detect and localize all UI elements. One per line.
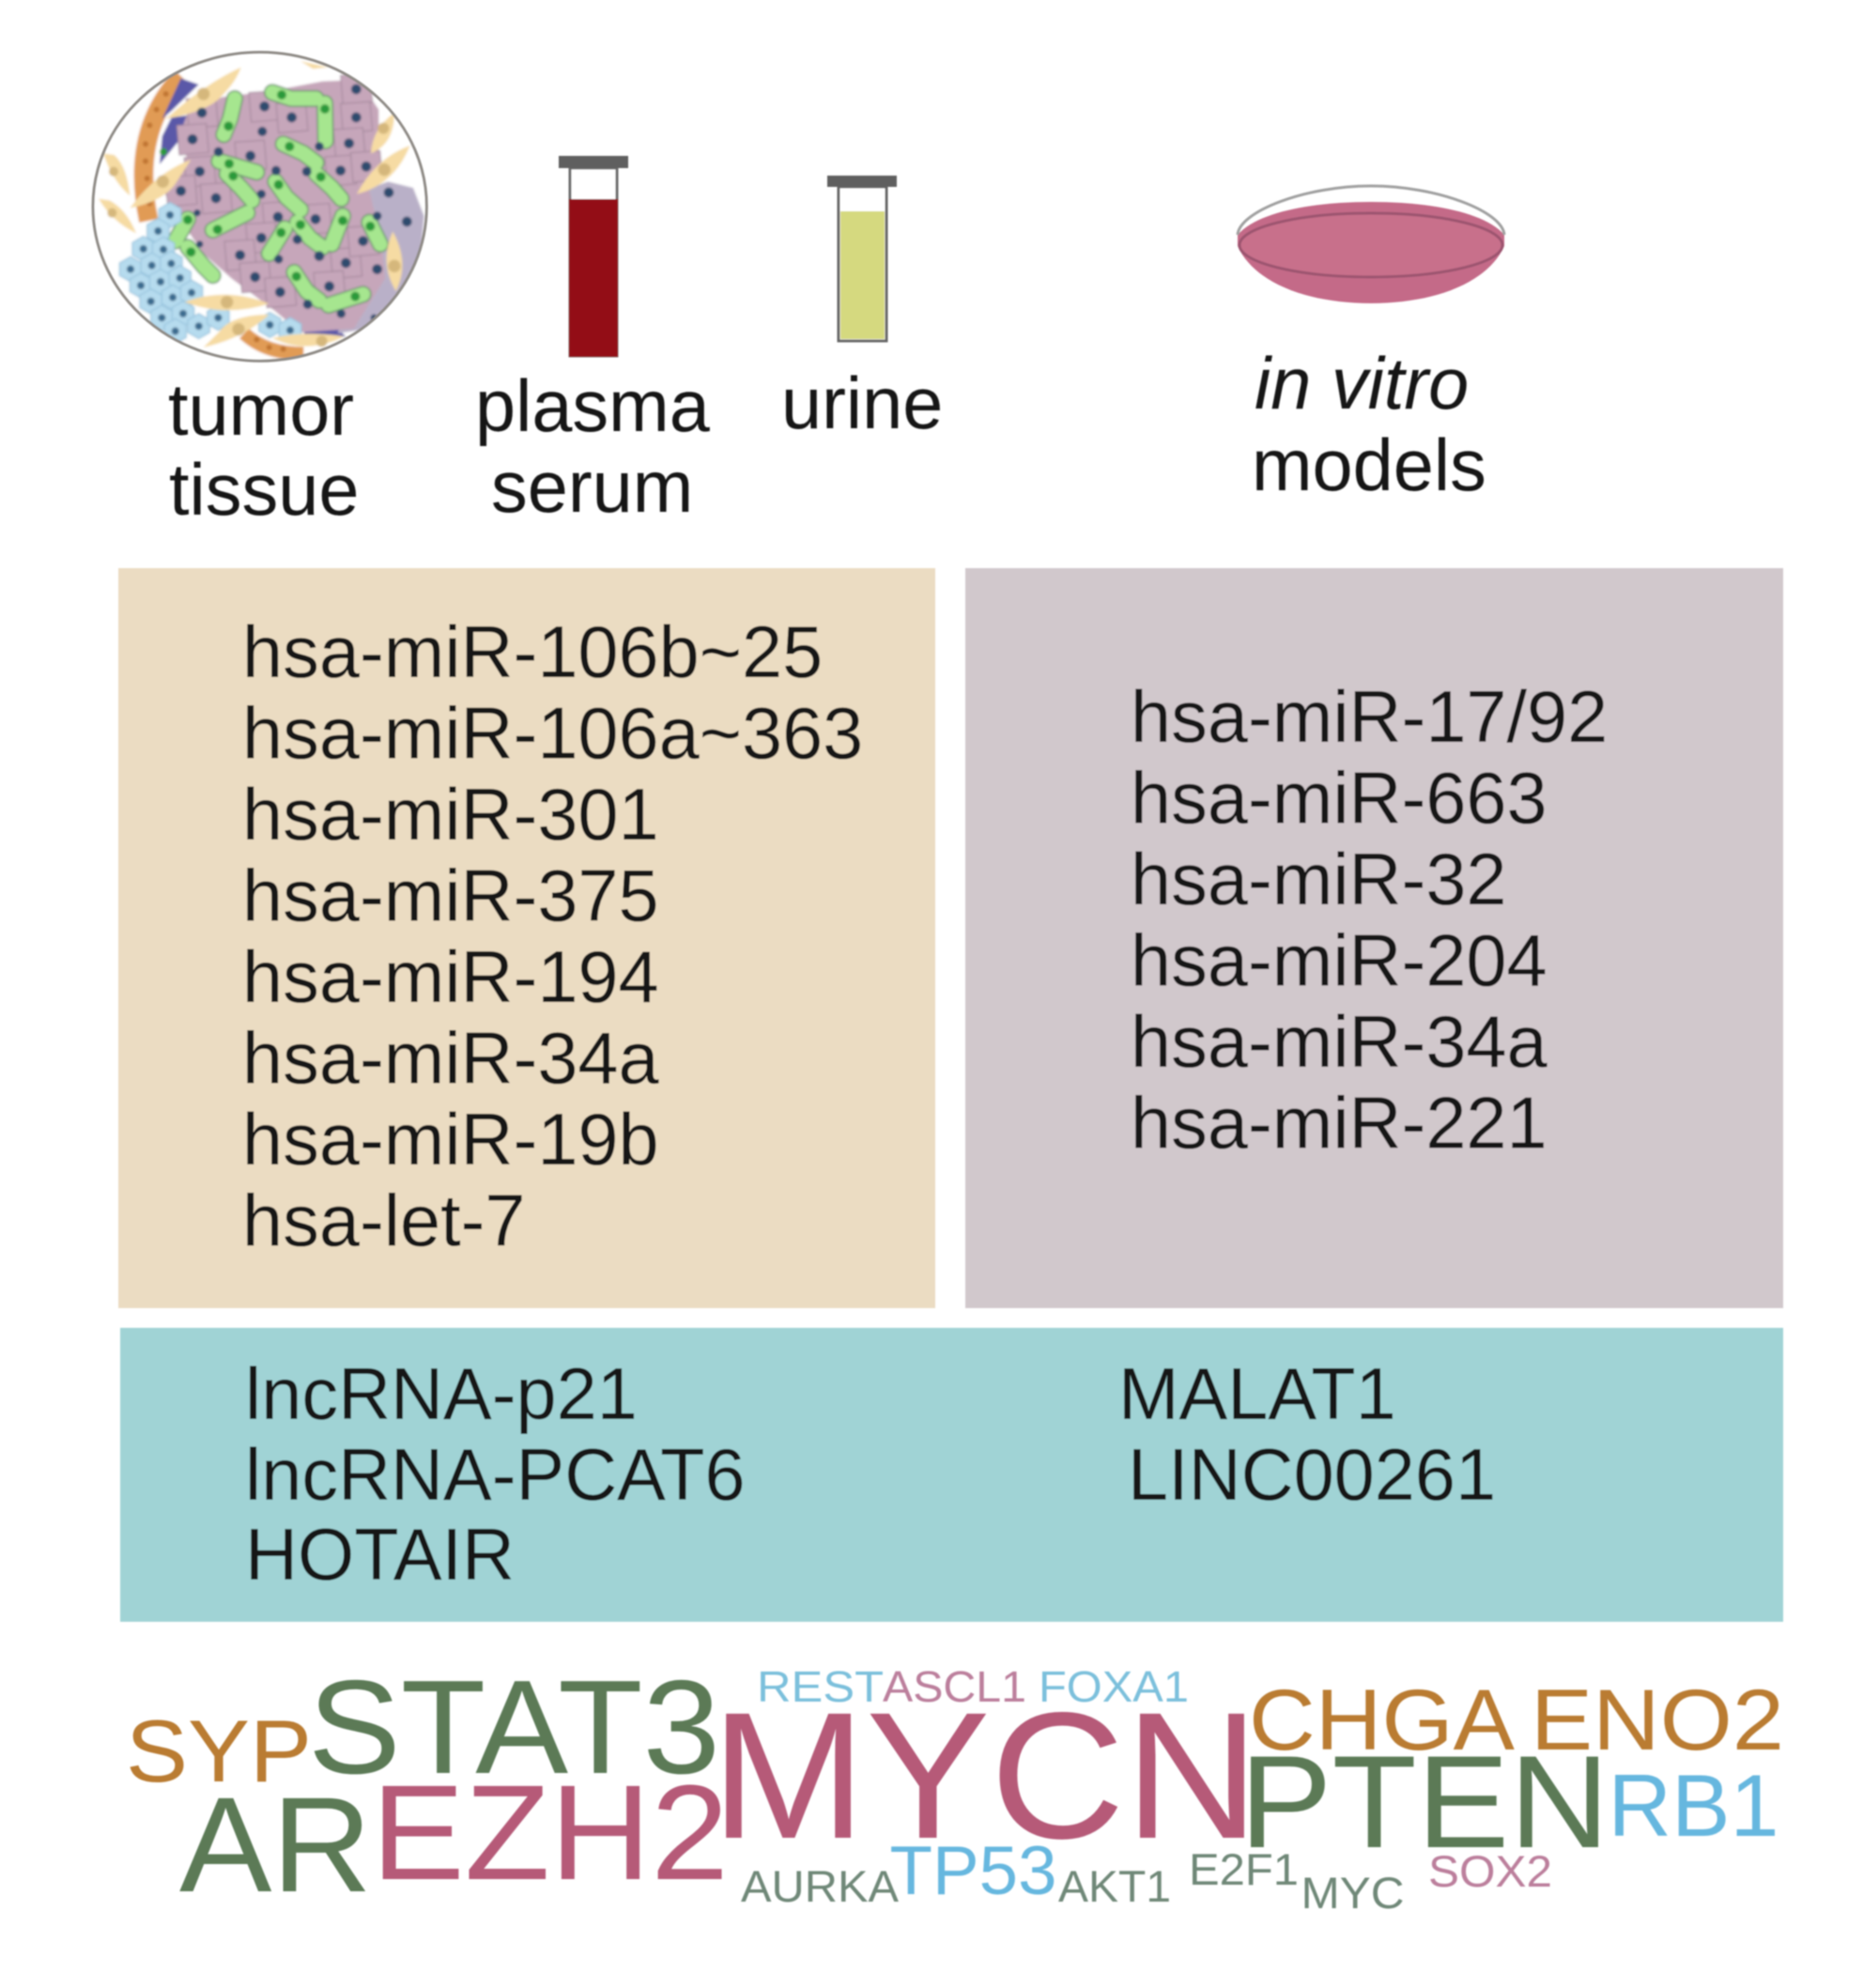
word cloud: genes: ENO2: [1531, 1672, 1784, 1768]
panel: grey miRNA list: hsa-miR-32: [1131, 840, 1507, 920]
label: plasma serum: serum: [491, 447, 693, 528]
panel: grey miRNA list: hsa-miR-204: [1131, 920, 1547, 1001]
word cloud: genes: [126, 1653, 1784, 1920]
panel: peach miRNA list: hsa-miR-106a~363: [242, 693, 863, 774]
word cloud: genes: ASCL1: [883, 1662, 1026, 1711]
icon: tumor tissue circle: [87, 44, 432, 369]
panel: grey miRNA list: [965, 568, 1783, 1308]
label: tumor tissue: tissue: [169, 450, 359, 531]
panel: teal lncRNA list: lncRNA-PCAT6: [245, 1435, 746, 1516]
word cloud: genes: PTEN: [1239, 1728, 1609, 1875]
word cloud: genes: MYCN: [711, 1674, 1259, 1876]
panel: peach miRNA list: hsa-miR-19b: [242, 1100, 659, 1180]
icon: plasma tube: [559, 156, 628, 357]
panel: grey miRNA list: hsa-miR-17/92: [1131, 677, 1608, 758]
word cloud: genes: AURKA: [741, 1861, 900, 1911]
panel: teal lncRNA list: LINC00261: [1128, 1435, 1496, 1516]
word cloud: genes: E2F1: [1189, 1844, 1299, 1894]
label: in vitro models: models: [1252, 425, 1486, 506]
word cloud: genes: RB1: [1608, 1756, 1778, 1855]
label: in vitro models: [1252, 344, 1486, 506]
label: urine: urine: [781, 363, 943, 444]
word cloud: genes: MYC: [1301, 1868, 1405, 1918]
label: in vitro models: in vitro: [1255, 344, 1469, 424]
word cloud: genes: SYP: [126, 1702, 312, 1800]
word cloud: genes: REST: [757, 1662, 884, 1711]
panel: teal lncRNA list: MALAT1: [1118, 1354, 1396, 1435]
label: plasma serum: plasma: [475, 366, 711, 447]
panel: grey miRNA list: hsa-miR-663: [1131, 759, 1547, 840]
label: tumor tissue: [168, 370, 359, 531]
panel: peach miRNA list: hsa-miR-106b~25: [242, 612, 823, 693]
panel: grey miRNA list: hsa-miR-221: [1131, 1084, 1547, 1164]
panel: peach miRNA list: [118, 568, 935, 1308]
word cloud: genes: AKT1: [1058, 1861, 1171, 1911]
word cloud: genes: FOXA1: [1039, 1662, 1189, 1711]
panel: grey miRNA list: hsa-miR-34a: [1131, 1002, 1548, 1083]
word cloud: genes: STAT3: [308, 1653, 720, 1802]
panel: peach miRNA list: hsa-let-7: [242, 1181, 526, 1262]
label: plasma serum: [475, 366, 711, 528]
panel: peach miRNA list: hsa-miR-375: [242, 856, 659, 937]
panel: peach miRNA list: hsa-miR-194: [242, 937, 659, 1018]
icon: petri dish: [1238, 186, 1504, 303]
word cloud: genes: SOX2: [1428, 1846, 1552, 1896]
panel: teal lncRNA list: [120, 1328, 1783, 1622]
icon: urine tube: [827, 176, 897, 341]
word cloud: genes: TP53: [890, 1833, 1057, 1909]
panel: peach miRNA list: hsa-miR-301: [242, 775, 659, 855]
word cloud: genes: EZH2: [372, 1757, 729, 1908]
word cloud: genes: AR: [179, 1769, 372, 1920]
word cloud: genes: CHGA: [1249, 1672, 1516, 1768]
panel: teal lncRNA list: lncRNA-p21: [245, 1354, 638, 1435]
label: tumor tissue: tumor: [168, 370, 354, 451]
panel: peach miRNA list: hsa-miR-34a: [242, 1018, 660, 1099]
panel: teal lncRNA list: HOTAIR: [245, 1515, 515, 1595]
